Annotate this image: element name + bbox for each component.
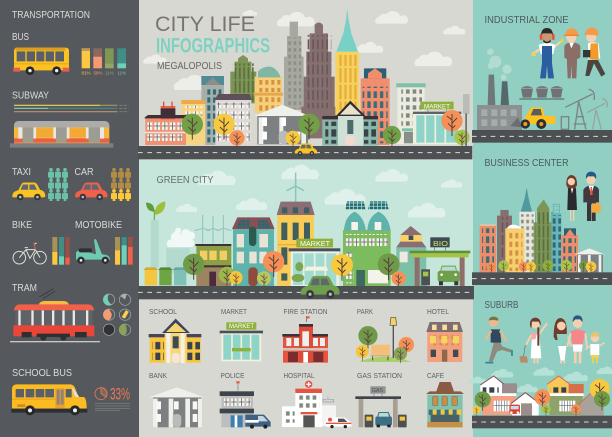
- building: gray-blue tower: [201, 76, 224, 145]
- chart: subway lines: [14, 105, 128, 112]
- trees: [182, 110, 470, 149]
- building: market: [413, 102, 461, 144]
- clouds: [143, 10, 465, 90]
- building: green tower: [230, 55, 256, 103]
- title: infographics: INFOGRAPHICS: [156, 34, 270, 58]
- building: teal house: [232, 217, 275, 286]
- icon: taxi: [12, 182, 45, 200]
- leaves near car: [292, 262, 304, 282]
- label: car: CAR: [74, 167, 94, 178]
- mine carts: [519, 86, 564, 99]
- icon: market: [220, 322, 263, 361]
- label: bus: BUS: [12, 32, 29, 43]
- building: yellow tall house: [277, 202, 315, 286]
- clouds: [468, 366, 612, 392]
- wind turbines: [195, 173, 304, 243]
- runner: [485, 317, 513, 363]
- building: salmon tower: [361, 68, 390, 145]
- building: mauve tower: [301, 22, 336, 138]
- icon: hotel: [426, 322, 463, 362]
- building: salmon house: [145, 102, 186, 145]
- road: [472, 130, 612, 143]
- recycling bins: [143, 267, 187, 285]
- label: tram: TRAM: [12, 283, 37, 294]
- label: fire station: FIRE STATION: [284, 309, 328, 316]
- engineer with tablet: [583, 27, 605, 77]
- smoke: [487, 48, 512, 80]
- chart: tram pie icons: [103, 294, 131, 335]
- building: brown eco house: [195, 244, 231, 286]
- businessman: [583, 172, 601, 221]
- bar chart: bus stats: 58%: [94, 70, 103, 76]
- title: city life: CITY LIFE: [155, 12, 255, 36]
- trees: [473, 379, 610, 417]
- panel: business center: [472, 158, 612, 285]
- icon: subway train: [10, 121, 113, 148]
- building: market: [289, 239, 340, 286]
- label: school: SCHOOL: [149, 309, 177, 316]
- label: bike: BIKE: [12, 220, 32, 231]
- icon: school: [149, 319, 201, 363]
- icon: school bus: [11, 384, 87, 415]
- market sign: MARKET: [300, 239, 330, 248]
- label: green city: GREEN CITY: [156, 175, 214, 186]
- bar chart: bus stats: 81%: [82, 70, 91, 76]
- small house 1: [511, 393, 539, 416]
- label: bank: BANK: [149, 373, 167, 380]
- icon: tram: [10, 289, 100, 342]
- icon: police: [220, 381, 271, 429]
- chart: school bus percentage: 33%: [110, 384, 130, 404]
- label: park: PARK: [357, 309, 373, 316]
- woman with dog: [519, 318, 547, 363]
- panel: transportation: [10, 9, 133, 415]
- label: subway: SUBWAY: [12, 90, 49, 102]
- panel: city buildings: [149, 309, 464, 429]
- icon: fire station: [282, 316, 328, 363]
- engineer: [564, 28, 580, 78]
- label: cafe: CAFE: [427, 373, 444, 380]
- icon: bicycle: [13, 242, 46, 264]
- label: school bus: SCHOOL BUS: [12, 368, 72, 379]
- building: school: [322, 101, 378, 146]
- label: taxi: TAXI: [12, 167, 31, 178]
- gas station: [410, 237, 470, 286]
- panel: city life: [138, 8, 472, 159]
- heading: transportation: TRANSPORTATION: [12, 9, 90, 21]
- label: hospital: HOSPITAL: [284, 373, 315, 380]
- trees: [183, 251, 406, 288]
- oil pumps: [561, 89, 607, 129]
- icon: red car: [509, 405, 520, 414]
- building: white tower: [519, 188, 535, 272]
- building: mauve tower: [497, 210, 512, 272]
- icon: gas station: [355, 386, 407, 427]
- bar chart: motobike: [115, 237, 133, 265]
- panel: industrial zone: [472, 15, 612, 143]
- small house 2: [578, 393, 604, 416]
- child: [585, 332, 605, 363]
- businesswoman: [566, 175, 577, 221]
- icon: pump car: [438, 266, 460, 285]
- icon: cafe: [426, 382, 464, 427]
- market sign: MARKET: [424, 104, 450, 110]
- skyline buildings: [138, 8, 472, 159]
- bar chart: bike: [52, 237, 70, 265]
- building: teal tower: [551, 204, 561, 272]
- building: sand tower: [254, 67, 283, 113]
- gas sign: GAS: [372, 388, 383, 394]
- chart: car people: [111, 168, 131, 201]
- label: market: MARKET: [221, 309, 248, 316]
- icon: green car: [301, 276, 340, 298]
- factory: [477, 75, 522, 130]
- building: yellow tower: [505, 225, 524, 272]
- label: hotel: HOTEL: [427, 309, 449, 316]
- building: bank: [254, 105, 310, 144]
- road: [472, 416, 612, 428]
- label: gas station: GAS STATION: [357, 373, 402, 380]
- road: [138, 146, 472, 159]
- woman: [554, 318, 571, 363]
- worker with earmuffs: [530, 28, 564, 78]
- label: industrial zone: INDUSTRIAL ZONE: [484, 15, 569, 26]
- label: police: POLICE: [220, 373, 245, 380]
- building: white apartment: [215, 94, 252, 145]
- icon: bank: [149, 387, 205, 427]
- building: salmon tower: [480, 224, 496, 272]
- road: [472, 272, 612, 285]
- icon: park: [356, 317, 414, 363]
- house with orange roof: [547, 376, 584, 415]
- trees: [486, 260, 596, 274]
- label: suburb: SUBURB: [484, 300, 519, 311]
- building: small house: [396, 226, 426, 286]
- label: motobike: MOTOBIKE: [75, 220, 122, 231]
- building: salmon tower 2: [561, 228, 578, 272]
- building: green tower: [534, 199, 554, 272]
- clouds: [176, 165, 462, 217]
- building: gray tower: [284, 22, 304, 110]
- icon: taxi on road: [295, 143, 317, 156]
- building: white block: [396, 83, 426, 144]
- icon: motobike: [76, 239, 110, 264]
- factory with plant: [146, 201, 195, 273]
- chart: school bus percentage: [95, 384, 130, 411]
- market sign: MARKET: [229, 324, 254, 330]
- label: business center: BUSINESS CENTER: [484, 158, 568, 169]
- street lamp: [463, 94, 470, 146]
- bar chart: bus stats: 11%: [105, 70, 114, 76]
- icon: bus: [13, 48, 69, 75]
- man: [567, 315, 587, 363]
- chart: taxi people: [48, 168, 68, 201]
- house with gray roof: [480, 376, 517, 415]
- building: green apartment: [343, 201, 391, 286]
- building: light yellow: [181, 100, 205, 145]
- icon: hospital: [282, 381, 351, 428]
- panel: suburb: [468, 300, 612, 428]
- icon: loader: [510, 107, 555, 129]
- building: yellow tower: [335, 8, 359, 115]
- building: bank: [575, 248, 605, 272]
- bar chart: bus stats: 11%: [118, 70, 126, 76]
- bar chart: bus stats: [82, 48, 126, 76]
- bio sign: BIO: [433, 241, 449, 248]
- subtitle: megalopolis: MEGALOPOLIS: [157, 61, 222, 72]
- panel: green city: [138, 165, 474, 299]
- icon: car: [75, 182, 108, 200]
- road: [138, 286, 474, 299]
